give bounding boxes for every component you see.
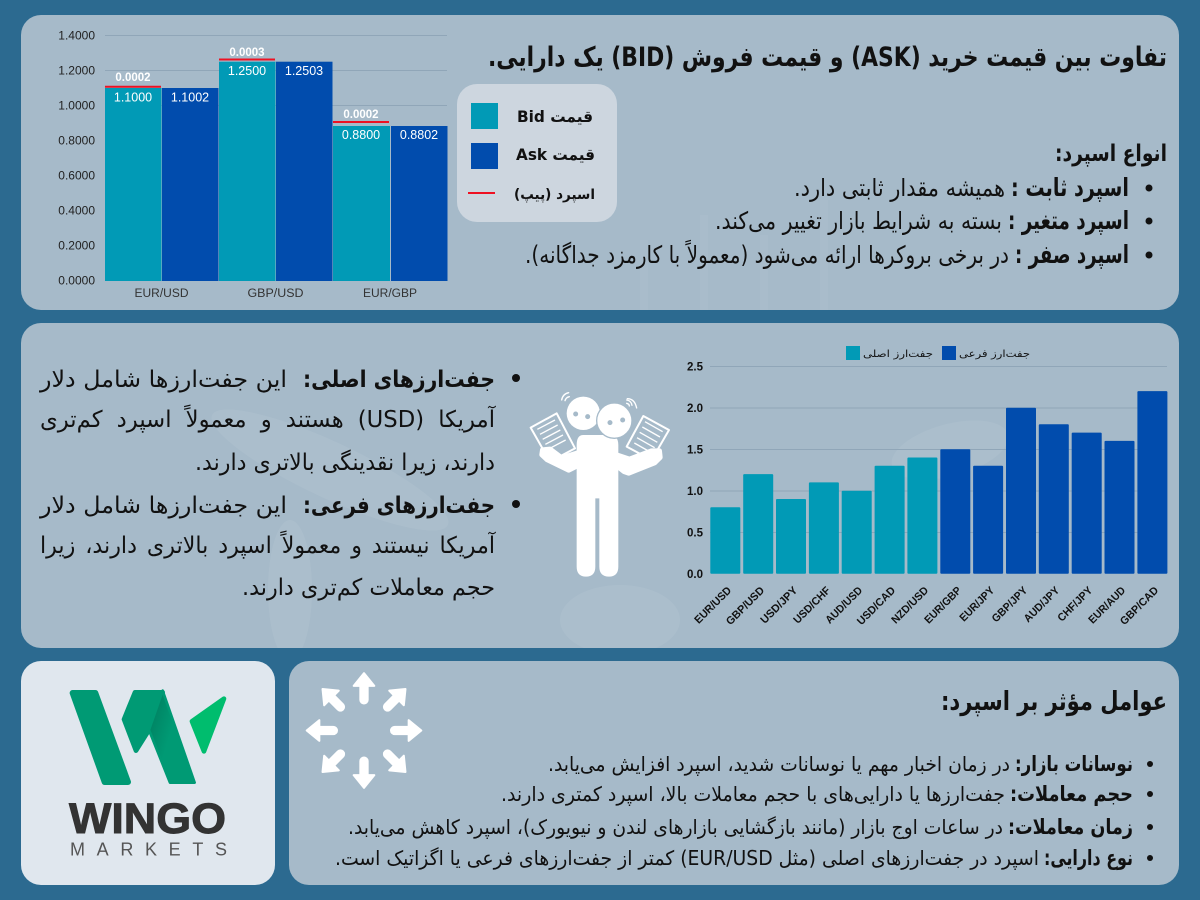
- bar chart: bid and ask prices: 0.0002: [115, 72, 151, 84]
- text block: factors list: زمان معاملات:: [1008, 815, 1133, 839]
- bar chart: bid and ask prices: 1.2000: [58, 64, 95, 78]
- text block: pair definitions: این جفت‌ارزها شامل دلار: [39, 493, 287, 519]
- bar chart: spread by currency pair: GBP/USD: [724, 585, 767, 628]
- bar chart: spread by currency pair: GBP/JPY: [990, 584, 1031, 625]
- bar chart: bid and ask prices: 1.1002: [171, 90, 209, 104]
- text block: spread types: در برخی بروکرها ارائه می‌شود (معمولاً با کارمزد جداگانه).: [525, 239, 1009, 269]
- chart legend: pair types: جفت‌ارز فرعی: [959, 349, 1030, 360]
- text block: factors list: جفت‌ارزها یا دارایی‌های با حجم معاملات بالا، اسپرد کمتری دارند.: [501, 782, 1005, 807]
- panel: major and minor pairs: [21, 323, 1179, 660]
- text block: pair definitions: جفت‌ارزهای فرعی:: [303, 493, 495, 519]
- bar chart: bid and ask prices: 0.8000: [58, 134, 95, 148]
- text block: spread types: اسپرد صفر :: [1015, 240, 1129, 270]
- logo wordmark: MARKETS: [70, 840, 227, 860]
- bar chart: spread by currency pair: CHF/JPY: [1056, 584, 1096, 624]
- bar chart: bid and ask prices: 1.2500: [228, 64, 266, 78]
- chart legend: اسپرد (پیپ): [514, 187, 595, 203]
- text block: spread types: [525, 141, 1167, 270]
- bar chart: bid and ask prices: 0.0003: [229, 47, 265, 59]
- bar chart: spread by currency pair: USD/CAD: [855, 585, 898, 628]
- text block: pair definitions: حجم معاملات کم‌تری دارند.: [242, 575, 495, 601]
- bar chart: bid and ask prices: 0.0002: [343, 109, 379, 121]
- chart legend: قیمت Ask: [516, 145, 595, 164]
- text block: factors list: [335, 752, 1153, 871]
- bar chart: bid and ask prices: 1.2503: [285, 64, 323, 78]
- bar chart: spread by currency pair: AUD/USD: [823, 585, 865, 626]
- text block: pair definitions: این جفت‌ارزها شامل دلار: [39, 367, 287, 393]
- panel: logo: [21, 661, 275, 885]
- text block: pair definitions: جفت‌ارزهای اصلی:: [303, 367, 495, 393]
- bar chart: bid and ask prices: 1.0000: [58, 98, 95, 112]
- bar chart: spread by currency pair: AUD/JPY: [1022, 584, 1063, 625]
- bar chart: spread by currency pair: 1.0: [687, 486, 703, 498]
- text block: factors list: حجم معاملات:: [1010, 782, 1133, 806]
- chart legend: pair types: جفت‌ارز اصلی: [863, 349, 933, 360]
- bar chart: spread by currency pair: 2.5: [687, 362, 704, 374]
- bar chart: spread by currency pair: USD/CHF: [791, 584, 833, 626]
- bar chart: bid and ask prices: 0.2000: [58, 238, 95, 252]
- text block: pair definitions: دارند، زیرا نقدینگی بالاتری دارند.: [195, 449, 495, 476]
- bar chart: bid and ask prices: 0.4000: [58, 204, 95, 218]
- text block: spread types: اسپرد ثابت :: [1011, 173, 1129, 203]
- text block: pair definitions: آمریکا نیستند و معمولاً اسپرد بالاتری دارند، زیرا: [40, 531, 497, 559]
- bar chart: spread by currency pair: EUR/GBP: [922, 585, 964, 626]
- bar chart: bid and ask prices: GBP/USD: [248, 288, 304, 300]
- bar chart: spread by currency pair: 2.0: [687, 403, 703, 415]
- text block: spread types: بسته به شرایط بازار تغییر می‌کند.: [715, 207, 1002, 235]
- text block: pair definitions: [39, 367, 520, 601]
- text block: spread types: همیشه مقدار ثابتی دارد.: [794, 174, 1005, 202]
- bar chart: bid and ask prices: EUR/GBP: [363, 288, 417, 300]
- text block: factors list: در زمان اخبار مهم یا نوسانات شدید، اسپرد افزایش می‌یابد.: [548, 752, 1010, 777]
- text block: factors list: نوع دارایی:: [1044, 846, 1133, 870]
- bar chart: spread by currency pair: NZD/USD: [889, 585, 931, 626]
- bar chart: spread by currency pair: [687, 346, 1167, 628]
- bar chart: spread by currency pair: 1.5: [687, 444, 704, 456]
- logo wordmark: WINGO: [69, 795, 226, 843]
- bar chart: bid and ask prices: 0.6000: [58, 168, 95, 182]
- logo mark: [73, 691, 224, 783]
- chart legend: [457, 84, 617, 222]
- text block: factors list: نوسانات بازار:: [1015, 752, 1133, 776]
- bar chart: bid and ask prices: EUR/USD: [134, 288, 188, 300]
- bar chart: bid and ask prices: [58, 28, 448, 300]
- bar chart: bid and ask prices: 0.8800: [342, 128, 380, 142]
- icon: arrows pointing outward: [307, 673, 421, 788]
- bar chart: spread by currency pair: GBP/CAD: [1118, 585, 1161, 628]
- text block: factors list: در ساعات اوج بازار (مانند بازگشایی بازارهای لندن و نیویورک)، اسپرد کاهش می‌یابد.: [348, 815, 1003, 840]
- text block: spread types: اسپرد متغیر :: [1008, 206, 1129, 236]
- text block: spread types: انواع اسپرد:: [1055, 141, 1167, 167]
- bar chart: spread by currency pair: EUR/JPY: [958, 584, 998, 624]
- bar chart: spread by currency pair: USD/JPY: [758, 584, 801, 626]
- bar chart: spread by currency pair: 0.5: [687, 528, 704, 540]
- bar chart: spread by currency pair: 0.0: [687, 569, 703, 581]
- panel: factors affecting spread: [289, 661, 1179, 885]
- chart legend: قیمت Bid: [517, 107, 593, 126]
- bar chart: spread by currency pair: EUR/AUD: [1086, 585, 1128, 626]
- bar chart: bid and ask prices: 0.8802: [400, 128, 438, 142]
- icon: confused person with documents: [531, 393, 669, 577]
- bar chart: spread by currency pair: EUR/USD: [692, 585, 734, 626]
- chart legend: pair types: [846, 346, 1030, 360]
- panel: spread chart and types: [21, 15, 1179, 310]
- bar chart: bid and ask prices: 1.1000: [114, 90, 152, 104]
- bar chart: bid and ask prices: 1.4000: [58, 28, 95, 42]
- bar chart: bid and ask prices: 0.0000: [58, 274, 95, 288]
- text block: factors list: اسپرد در جفت‌ارزهای اصلی (مثل EUR/USD) کمتر از جفت‌ارزهای فرعی یا اگزاتیک است.: [335, 846, 1039, 871]
- text block: pair definitions: آمریکا (USD) هستند و معمولاً اسپرد کم‌تری: [40, 405, 497, 433]
